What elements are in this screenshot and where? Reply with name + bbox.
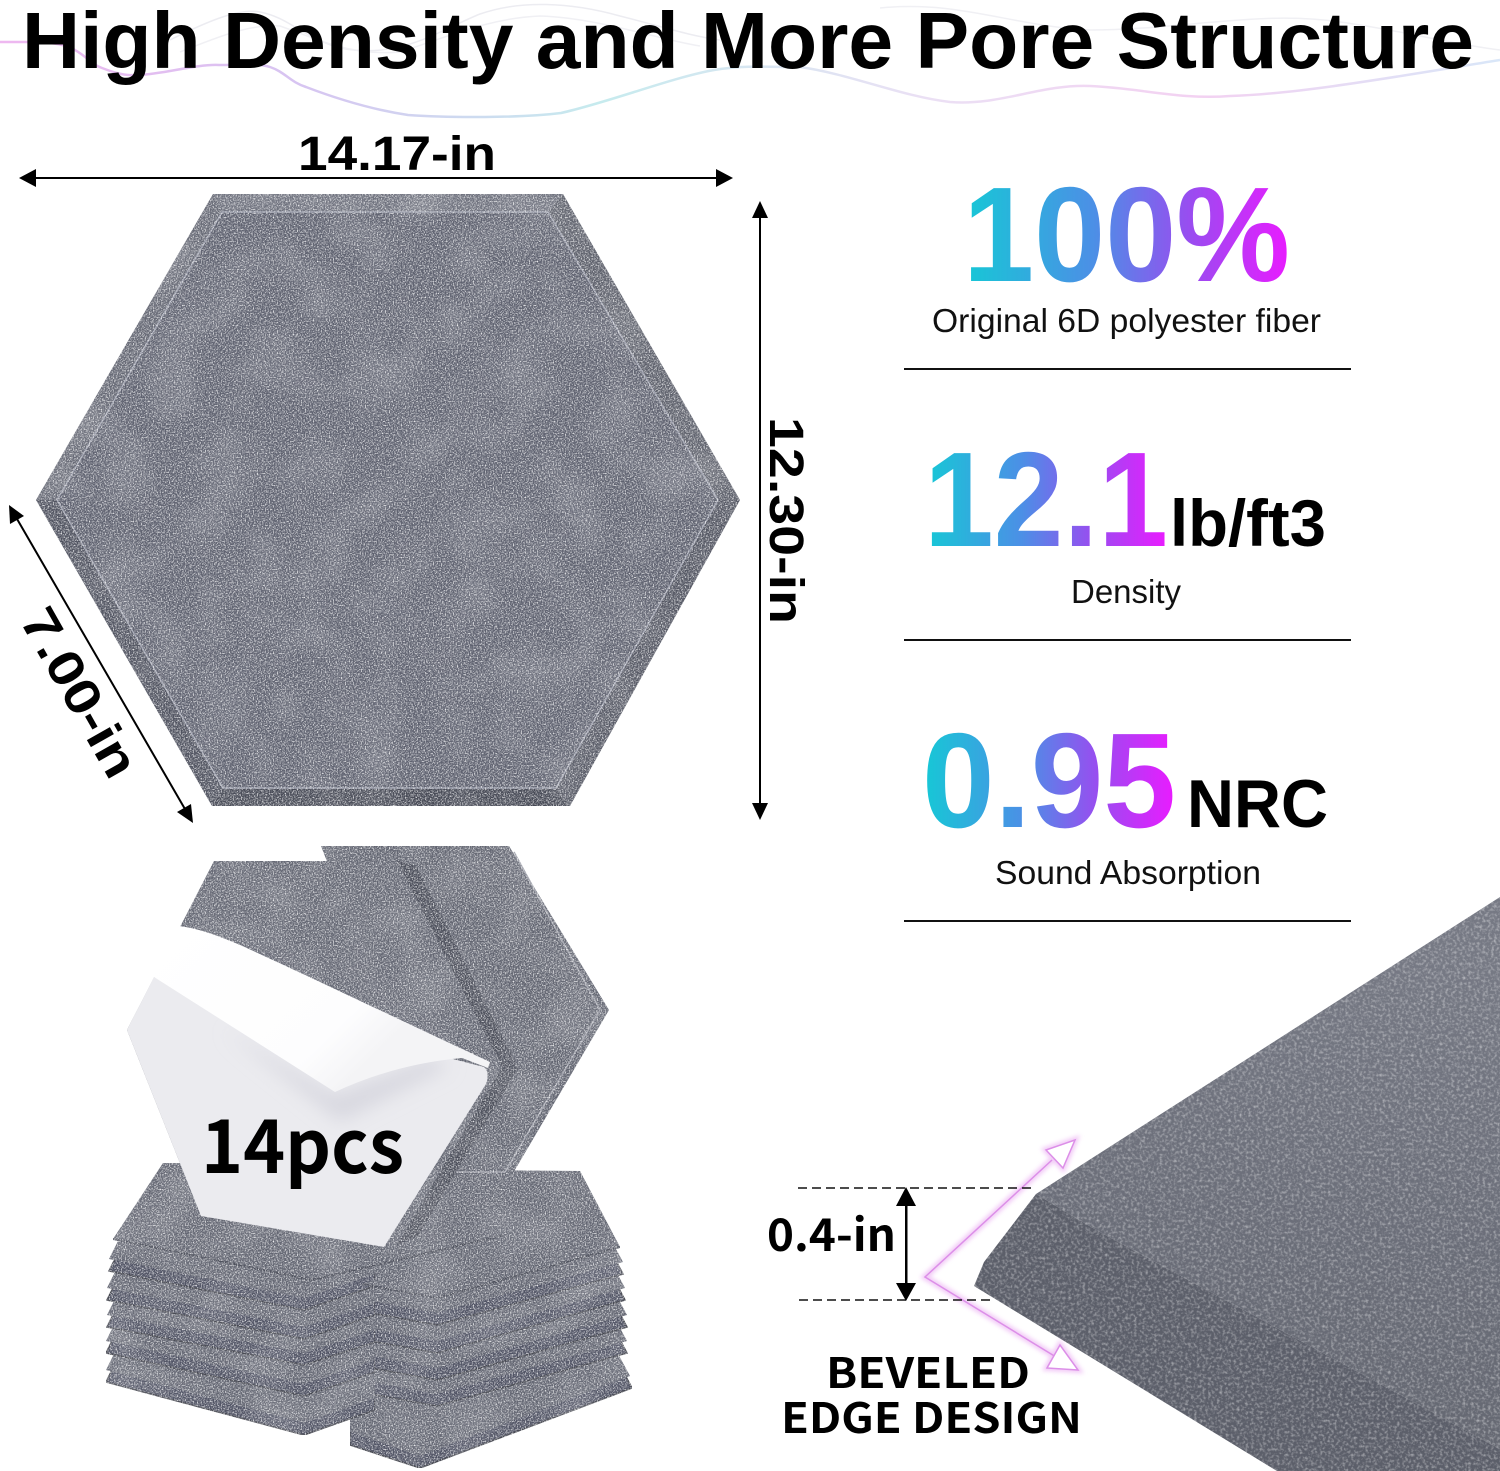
right stack of tiles [350, 1236, 632, 1468]
thickness dimension: 0.4-in [767, 1187, 1036, 1301]
thickness dimension: 0.4-in: 0.4-in [767, 1199, 896, 1264]
side dimension: 7.00-in: 7.00-in [9, 598, 150, 787]
side dimension: 7.00-in [9, 505, 193, 823]
panel bevel [974, 1194, 1500, 1471]
background wave lines [0, 4, 1500, 117]
hexagon upper-right bevel [548, 194, 740, 500]
back hexagon [321, 846, 609, 1180]
bevel label: EDGE DESIGN [781, 1385, 1082, 1446]
bevel label: BEVELED [826, 1340, 1030, 1401]
bevel label [781, 1340, 1082, 1446]
stat: NRC: Sound Absorption [995, 854, 1261, 891]
width dimension: 14.17-in [19, 128, 733, 187]
quantity label: 14pcs [201, 1088, 404, 1195]
beveled panel close-up [974, 897, 1500, 1471]
hexagon lower-left bevel [36, 500, 223, 806]
stat: density: 12.1 [924, 424, 1168, 575]
top tiles [113, 1163, 620, 1298]
adhesive liner [127, 977, 488, 1247]
hexagon face [57, 212, 718, 788]
crease shadow [225, 1030, 450, 1122]
front hexagon [127, 861, 518, 1245]
height dimension: 12.30-in: 12.30-in [759, 417, 812, 624]
stat: 100%: 100% [963, 159, 1290, 310]
stat: 100%: Original 6D polyester fiber [932, 302, 1321, 339]
stat: density: Density [1071, 573, 1181, 610]
hexagon bottom bevel [212, 788, 570, 806]
panel face [1036, 897, 1500, 1449]
stat: NRC: NRC [1187, 766, 1328, 842]
hexagon lower-right bevel [556, 500, 740, 806]
hexagon felt panel [36, 194, 740, 806]
stat: density [924, 424, 1326, 610]
height dimension: 12.30-in [752, 201, 812, 820]
stat: NRC: 0.95 [922, 705, 1176, 856]
peeled flap [154, 926, 490, 1092]
left stack of tiles [106, 1231, 375, 1435]
bevel arrows [925, 1140, 1078, 1370]
stat: density: lb/ft3 [1170, 486, 1326, 560]
hexagon top bevel [213, 194, 563, 212]
hexagon upper-left bevel [36, 194, 222, 500]
width dimension: 14.17-in: 14.17-in [298, 128, 496, 181]
stacked panels with adhesive backing [106, 846, 632, 1468]
stat: NRC [922, 705, 1328, 891]
